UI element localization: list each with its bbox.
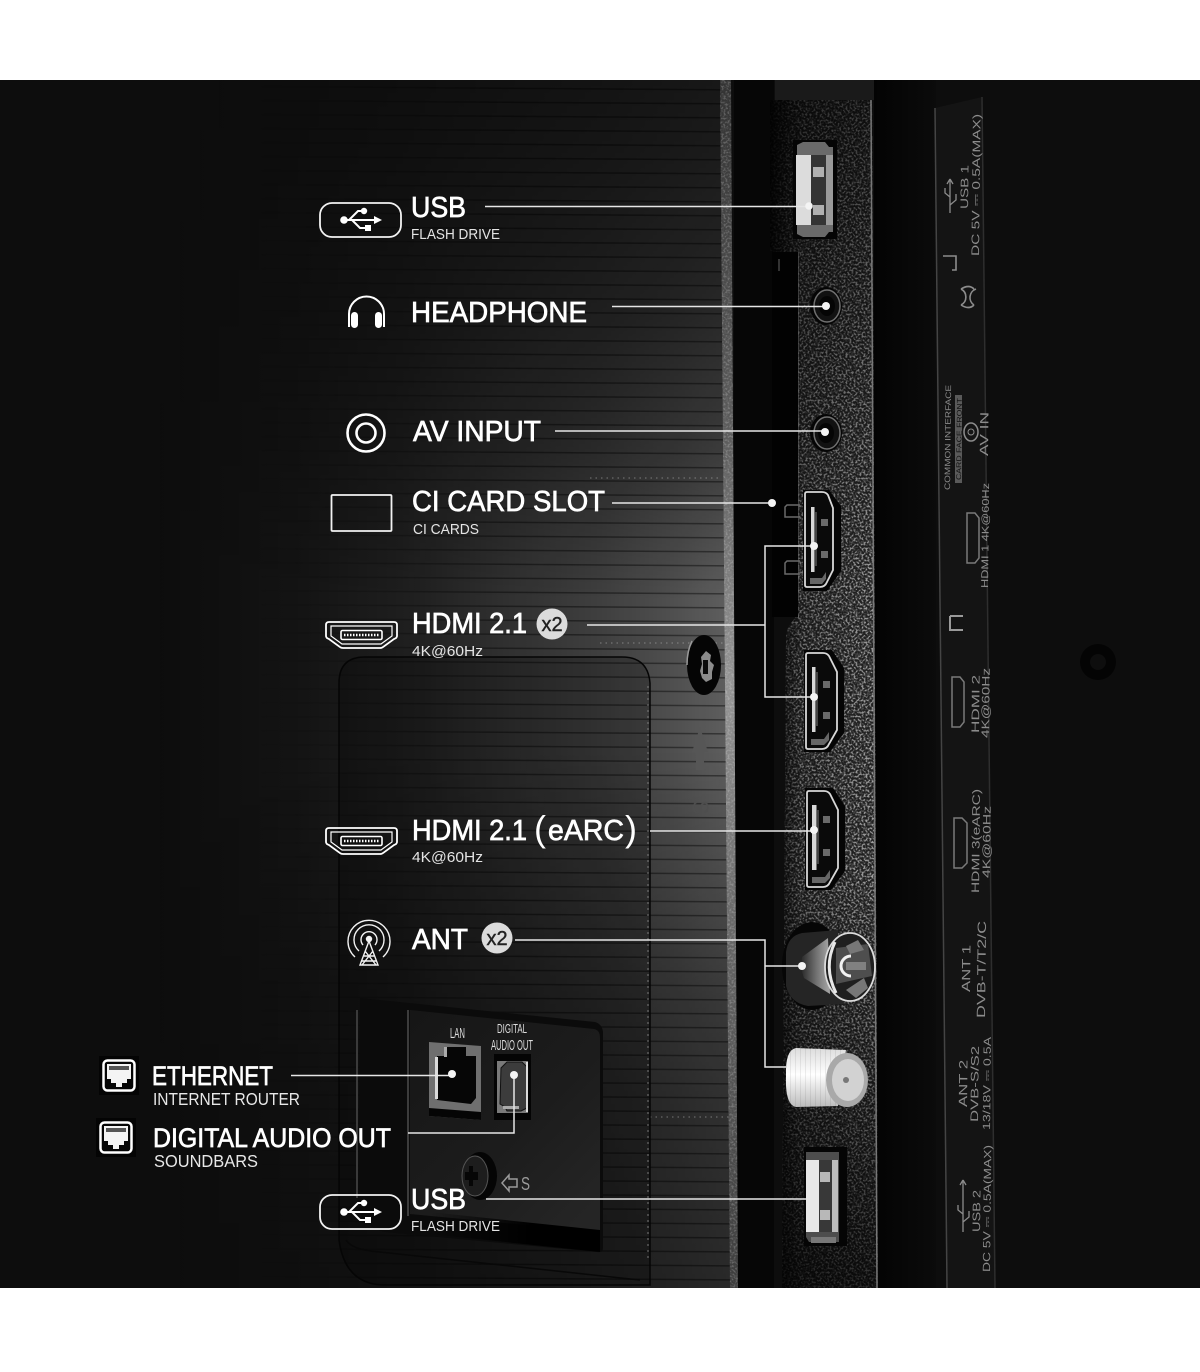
port: HDMI 2 (804, 650, 844, 752)
callout: ethernet (99, 1056, 300, 1109)
label: headphone marks (943, 256, 976, 308)
label: HDMI 3 (954, 789, 994, 893)
callout: ethernet: INTERNET ROUTER (153, 1089, 300, 1109)
badge: x2: x2 (486, 928, 508, 950)
badge: x2: x2 (541, 614, 563, 636)
LAN recess (346, 998, 640, 1280)
callout: HDMI eARC: eARC (548, 815, 624, 847)
port: digital audio out: AUDIO OUT (491, 1037, 533, 1054)
port: AV jack (810, 414, 842, 452)
icon: audio port (96, 1118, 136, 1157)
label: HDMI 2: HDMI 2 (970, 675, 983, 733)
callout: USB bottom: USB (411, 1184, 466, 1216)
icon: ethernet port (99, 1056, 139, 1095)
port: LAN (429, 1025, 481, 1120)
port: antenna 2 (786, 1048, 868, 1107)
callout: USB top: USB (411, 192, 466, 224)
line: HDMI 2.1 x2 (587, 542, 818, 701)
port screw and S mark: S (521, 1174, 530, 1194)
callout: USB bottom: FLASH DRIVE (411, 1218, 500, 1235)
vertical chassis edge (720, 80, 738, 1288)
faint moulded arrow and S marks (688, 727, 713, 815)
callout: CI card slot: CI CARDS (413, 521, 479, 538)
callout: HDMI eARC: ) (625, 808, 637, 849)
badge: x2 (482, 922, 512, 954)
icon: antenna (348, 920, 390, 965)
port plate (770, 100, 878, 1288)
line: CI card slot (612, 499, 776, 507)
callout: HDMI 2.1 x2: HDMI 2.1 (412, 608, 527, 640)
rear connector panel outline (339, 657, 650, 1285)
callout: digital audio out: DIGITAL AUDIO OUT (153, 1123, 391, 1153)
label: ANT 2 (956, 1037, 994, 1130)
faint moulded arrow and S marks: S (688, 800, 713, 815)
icon: HDMI (326, 622, 397, 648)
line: AV input (555, 428, 829, 436)
label: ANT 2: 13/18V ⎓ 0.5A (981, 1037, 994, 1130)
callout: ANT x2 (348, 920, 512, 965)
port: USB bottom (804, 1147, 847, 1246)
top chassis rim (775, 80, 874, 100)
callout: HDMI 2.1 x2 (326, 608, 568, 660)
label: USB 2: USB 2 (971, 1190, 983, 1232)
label: HDMI 3: 4K@60Hz (981, 806, 994, 878)
icon: HDMI (326, 828, 397, 854)
icon: USB (320, 203, 401, 237)
callout: AV input (348, 414, 541, 452)
label: USB 2: DC 5V ⎓ 0.5A(MAX) (981, 1145, 994, 1272)
callout: CI card slot (332, 486, 605, 538)
line: USB bottom (486, 1198, 806, 1200)
label: common interface: COMMON INTERFACE (943, 385, 953, 490)
label: common interface: CARD FACE FRONT (956, 397, 964, 480)
port: HDMI 1 (803, 490, 841, 591)
port: headphone jack (810, 287, 842, 325)
icon: headphones (349, 296, 384, 328)
label: common interface (943, 385, 991, 490)
port screw and S mark (462, 1152, 530, 1200)
callout: ethernet: ETHERNET (152, 1061, 273, 1091)
CI card slot (772, 252, 800, 617)
label: HDMI 1: HDMI 1 4K@60Hz (980, 483, 992, 588)
line: ANT x2 (515, 940, 806, 1067)
badge: x2 (536, 608, 568, 640)
line: headphone (612, 302, 830, 310)
label: HDMI 2 (952, 668, 993, 738)
printed label strip (935, 97, 995, 1288)
callout: USB top: FLASH DRIVE (411, 226, 500, 243)
callout: CI card slot: CI CARD SLOT (412, 486, 605, 518)
port: LAN: LAN (450, 1025, 465, 1042)
callout: USB bottom (320, 1184, 500, 1235)
label: ANT 1 (959, 920, 989, 1018)
label: ANT 2: DVB-S/S2 (969, 1046, 982, 1122)
label: ANT 1: DVB-T/T2/C (974, 920, 989, 1018)
callout: USB top (320, 192, 500, 243)
port: digital audio out: DIGITAL (497, 1021, 527, 1036)
label: ANT 2: ANT 2 (956, 1059, 970, 1107)
port: HDMI 3 (805, 788, 845, 890)
label: HDMI 3: HDMI 3(eARC) (970, 789, 983, 893)
right side screw (1080, 644, 1116, 680)
callout: ANT x2: ANT (412, 924, 468, 956)
callout: HDMI eARC (326, 808, 637, 866)
callout: HDMI eARC: ( (534, 808, 546, 849)
label: USB 1 (945, 114, 983, 256)
port: antenna 1 (782, 922, 875, 1010)
label: USB 2 (958, 1145, 994, 1272)
callout: digital audio out: SOUNDBARS (154, 1151, 258, 1171)
line: HDMI eARC (650, 826, 818, 834)
callout lines and anchor dots (291, 202, 830, 1199)
icon: USB (320, 1195, 401, 1229)
callout: digital audio out (96, 1118, 391, 1171)
black gap beside chassis (734, 80, 774, 1288)
right dark area (874, 80, 936, 1288)
callout: headphone: HEADPHONE (411, 297, 587, 329)
line: USB top (485, 202, 813, 210)
line: digital audio out (408, 1071, 518, 1133)
callout: HDMI eARC: HDMI 2.1 (412, 815, 527, 847)
label: HDMI 2: 4K@60Hz (980, 668, 993, 738)
label: common interface: AV IN (977, 412, 991, 456)
label: ANT 1: ANT 1 (959, 944, 973, 992)
label: USB 1: USB 1 (959, 165, 971, 209)
rear cover ridged surface (318, 80, 730, 1288)
screw (687, 635, 721, 695)
callout: HDMI eARC: 4K@60Hz (412, 849, 483, 866)
callout: HDMI 2.1 x2: 4K@60Hz (412, 643, 483, 660)
label: USB 1: DC 5V ⎓ 0.5A(MAX) (970, 114, 983, 256)
callout: AV input: AV INPUT (413, 416, 541, 448)
label: HDMI 1 (950, 483, 992, 630)
port: USB top (793, 140, 837, 239)
line: ethernet (291, 1070, 456, 1078)
icon: card (332, 495, 392, 531)
icon: AV ring (348, 414, 384, 452)
port: digital audio out (491, 1021, 533, 1120)
